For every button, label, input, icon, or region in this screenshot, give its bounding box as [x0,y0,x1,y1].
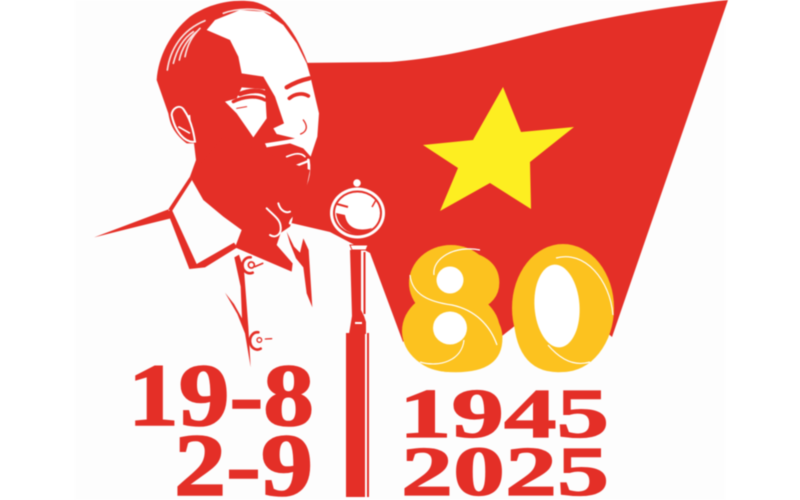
shirt placket [225,255,251,367]
year 1945: 1945 [399,376,609,453]
beard tendrils [267,203,290,236]
face highlight [207,10,319,157]
shirt buttons [243,257,272,350]
collar outline [167,209,237,269]
mic stand bar [346,333,365,497]
date 19-8: 19-8 [128,347,314,445]
number text: 80 [405,213,610,407]
number backing [402,244,614,372]
moustache and beard wisps [266,154,309,227]
icon: microphone [330,178,385,497]
hair highlights [167,9,270,70]
ear [172,107,195,142]
number swash lines [410,249,613,364]
number counters [433,263,582,349]
icon: yellow star [423,87,574,211]
left shoulder line [94,209,171,237]
mic head [330,188,385,238]
head silhouette [157,1,320,240]
eyes and brows [233,78,309,134]
anniversary number 80 [402,213,614,407]
portrait: head and collar [157,1,320,240]
mic stem [349,250,366,334]
portrait: neck, collar and shirt [94,137,312,367]
right shirt fold [287,232,312,307]
flag [270,0,728,342]
collar fold [168,177,192,212]
mic knob [352,178,362,188]
cheek highlight [225,87,267,137]
neck shadow [190,137,310,272]
